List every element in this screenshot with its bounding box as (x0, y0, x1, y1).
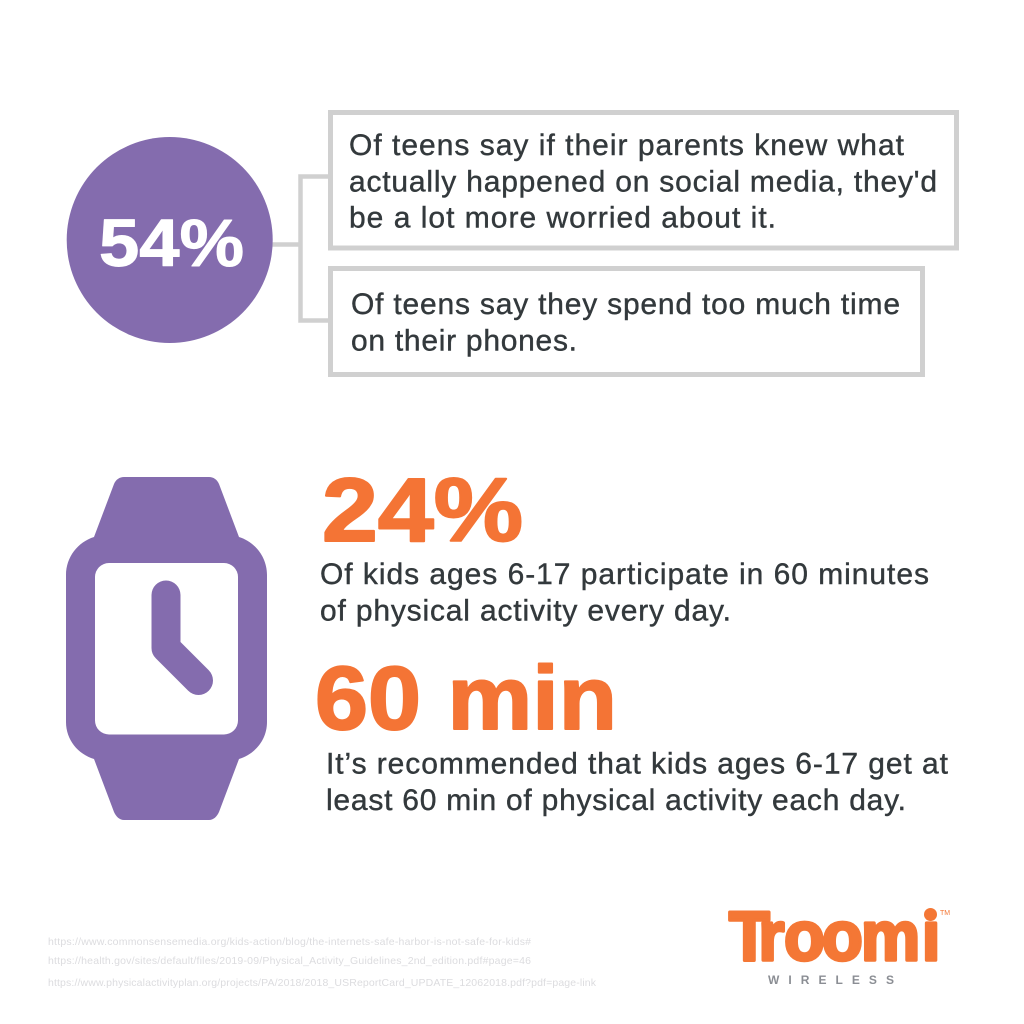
description: 60 min: least 60 min of physical activity each day. (326, 784, 906, 817)
stat block: 60 min recommended (315, 649, 949, 817)
logo: Troomi Wireless: WIRELESS (768, 973, 894, 987)
callout: parents would worry: Of teens say if their parents knew what (349, 129, 905, 162)
callout: parents would worry: actually happened on social media, they'd (349, 166, 937, 198)
source links (48, 936, 597, 989)
callout: too much phone time: Of teens say they spend too much time (351, 288, 900, 321)
description: 24% (320, 558, 929, 628)
callout: parents would worry: be a lot more worried about it. (349, 202, 776, 234)
callout: too much phone time: on their phones. (351, 324, 577, 358)
description: 60 min (326, 748, 949, 817)
callout: too much phone time (330, 268, 922, 374)
source links: https://www.physicalactivityplan.org/projects/PA/2018/2018_USReportCard_UPDATE_12062018.pdf?pdf=page-link (48, 977, 597, 989)
stat block: 24% of kids active (320, 461, 929, 628)
connector lines (272, 176, 330, 320)
description: 60 min: It’s recommended that kids ages 6-17 get at (326, 748, 949, 780)
description: 24%: Of kids ages 6-17 participate in 60 minutes (320, 558, 929, 591)
logo: Troomi Wireless: Troomi (729, 897, 940, 975)
stat circle: 54% (67, 137, 273, 343)
big number: 24%: 24% (322, 461, 523, 561)
description: 24%: of physical activity every day. (320, 594, 731, 628)
source links: https://health.gov/sites/default/files/2019-09/Physical_Activity_Guidelines_2nd_edition.pdf#page=46 (48, 955, 531, 967)
callout: parents would worry (330, 112, 956, 248)
panel: teen social media stats (67, 112, 956, 374)
logo: Troomi Wireless: TM (940, 910, 950, 917)
big number: 60 min: 60 min (315, 649, 617, 749)
icon: smartwatch (66, 477, 267, 820)
source links: https://www.commonsensemedia.org/kids-action/blog/the-internets-safe-harbor-is-not-safe-for-kids# (48, 936, 531, 948)
stat circle: 54%: 54% (99, 206, 244, 281)
